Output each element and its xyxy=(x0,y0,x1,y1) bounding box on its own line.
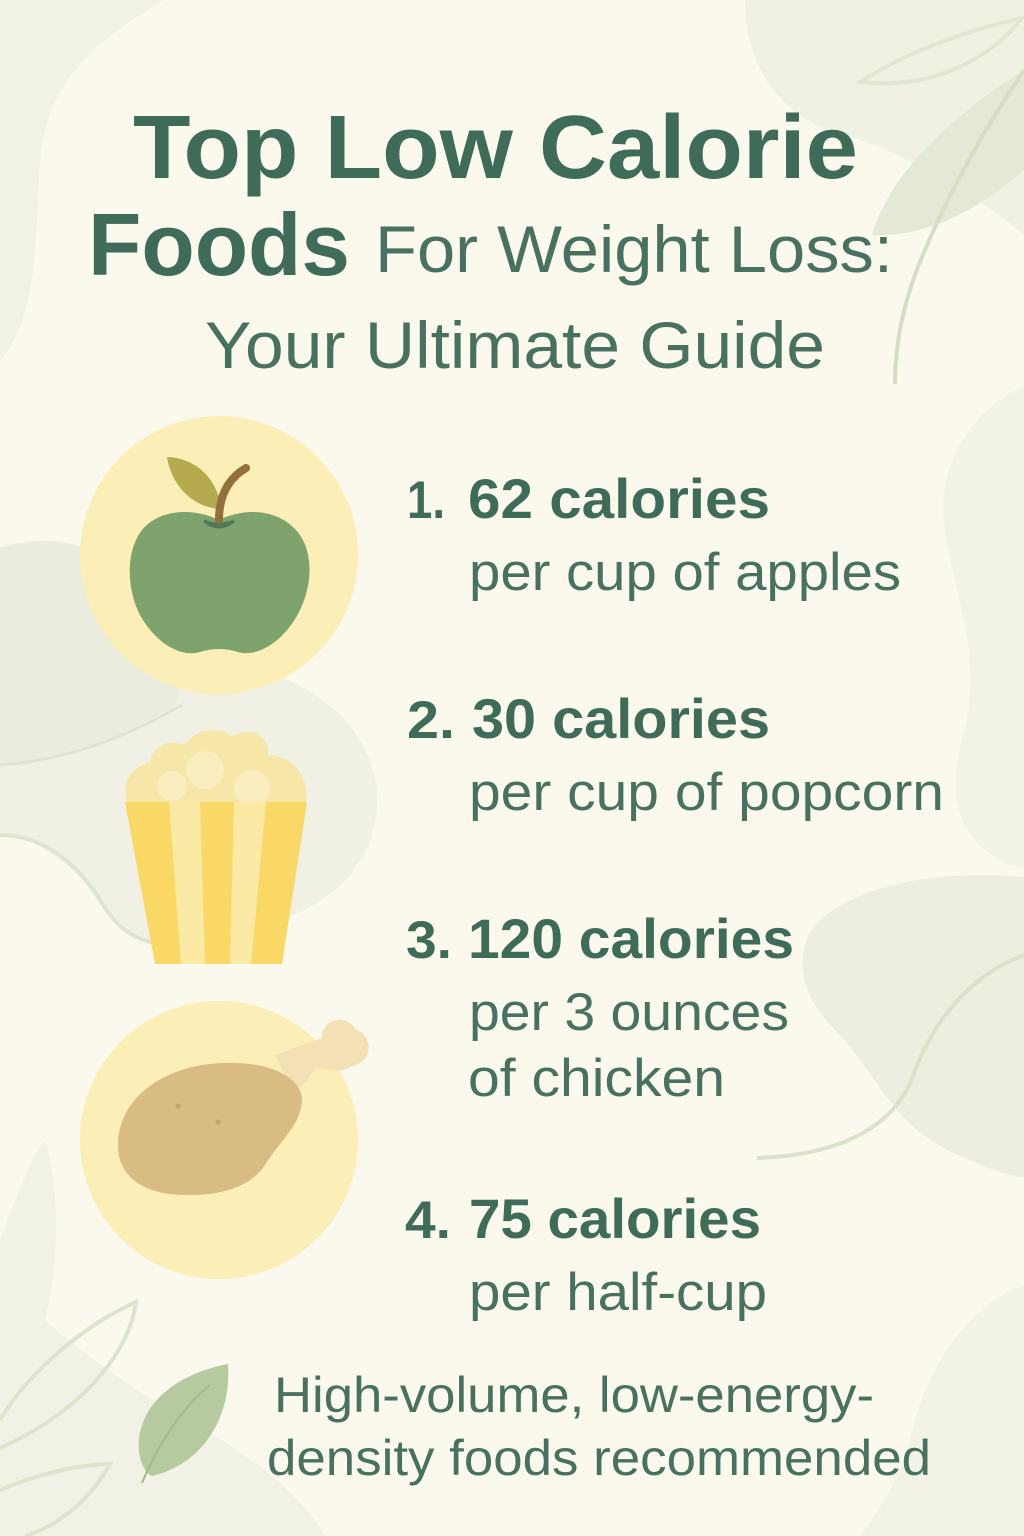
item 4 xyxy=(405,1187,767,1322)
icon: apple xyxy=(80,416,358,694)
title: For Weight Loss: xyxy=(375,212,893,286)
item 2: per cup of popcorn xyxy=(469,763,944,822)
item 1 xyxy=(407,467,901,602)
item 3: per 3 ounces xyxy=(469,983,789,1042)
item 2: 30 calories xyxy=(472,687,770,750)
item 4: 4. xyxy=(405,1191,451,1250)
item 3: 3. xyxy=(406,911,452,970)
footer note: density foods recommended xyxy=(267,1430,931,1486)
item 1: 1. xyxy=(407,471,445,530)
title xyxy=(88,98,893,382)
footer note xyxy=(267,1367,931,1486)
icon: popcorn xyxy=(125,730,307,964)
icon: green leaf xyxy=(139,1364,228,1483)
item 3 xyxy=(406,907,794,1108)
title: Foods xyxy=(88,195,350,294)
item 4: 75 calories xyxy=(469,1187,761,1250)
item 1: 62 calories xyxy=(468,467,770,530)
item 1: per cup of apples xyxy=(469,543,901,602)
item 4: per half-cup xyxy=(469,1263,767,1322)
item 2: 2. xyxy=(407,691,455,750)
footer note: High-volume, low-energy- xyxy=(274,1367,874,1423)
item 3: of chicken xyxy=(468,1049,725,1108)
title: Your Ultimate Guide xyxy=(205,308,825,382)
icon: chicken drumstick xyxy=(80,1001,369,1279)
item 2 xyxy=(407,687,944,822)
item 3: 120 calories xyxy=(468,907,794,970)
title: Top Low Calorie xyxy=(133,98,858,198)
